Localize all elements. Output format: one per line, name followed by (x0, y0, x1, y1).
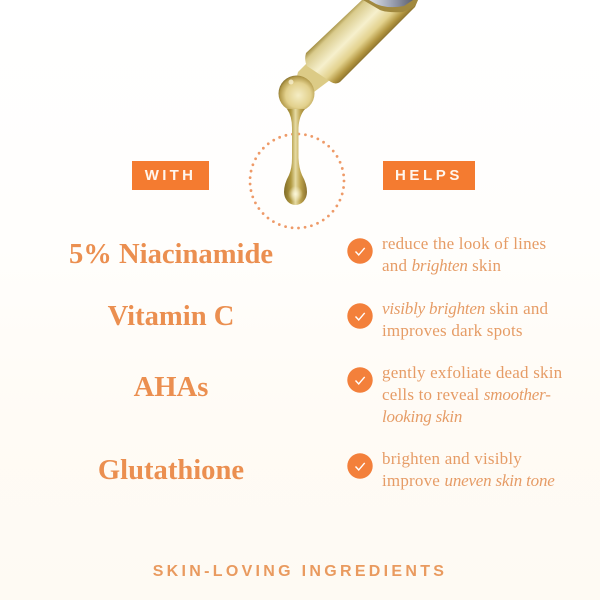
benefit text: improves dark spots (382, 321, 523, 340)
ingredient: ahas: AHAs (134, 372, 208, 403)
benefit: brighten (347, 299, 548, 340)
ingredient: vitamin c: Vitamin C (108, 301, 234, 332)
tag: helps (383, 161, 475, 190)
benefit: exfoliate (347, 363, 562, 426)
benefit text: cells to reveal smoother- (382, 385, 551, 404)
footer heading: SKIN-LOVING INGREDIENTS (153, 563, 447, 580)
icon: check (347, 238, 373, 264)
benefit text: visibly brighten skin and (382, 299, 548, 318)
benefit text: improve uneven skin tone (382, 471, 555, 490)
icon: check (347, 303, 373, 329)
ingredient: glutathione: Glutathione (98, 455, 244, 486)
benefit text (382, 363, 562, 426)
benefit text (382, 299, 548, 340)
icon: check (347, 367, 373, 393)
dropper neck (296, 60, 330, 92)
benefit text: reduce the look of lines (382, 234, 546, 253)
dropper tube (305, 0, 418, 84)
benefit: reduce lines (347, 234, 546, 275)
benefit text: and brighten skin (382, 256, 501, 275)
tag: with: WITH (145, 167, 196, 184)
benefit text: brighten and visibly (382, 449, 522, 468)
benefit: even tone (347, 449, 555, 490)
drop highlight (288, 186, 303, 202)
benefit text (382, 234, 546, 275)
dotted circle (250, 134, 344, 228)
oil stream and drop (284, 109, 307, 205)
icon: check (347, 453, 373, 479)
dropper cap (363, 0, 418, 12)
benefit text: looking skin (382, 407, 462, 426)
benefit text: gently exfoliate dead skin (382, 363, 562, 382)
benefit text (382, 449, 555, 490)
tag: with (132, 161, 209, 190)
ingredient: niacinamide: 5% Niacinamide (69, 239, 273, 270)
dropper bulb (278, 76, 314, 112)
tag: helps: HELPS (395, 167, 463, 184)
